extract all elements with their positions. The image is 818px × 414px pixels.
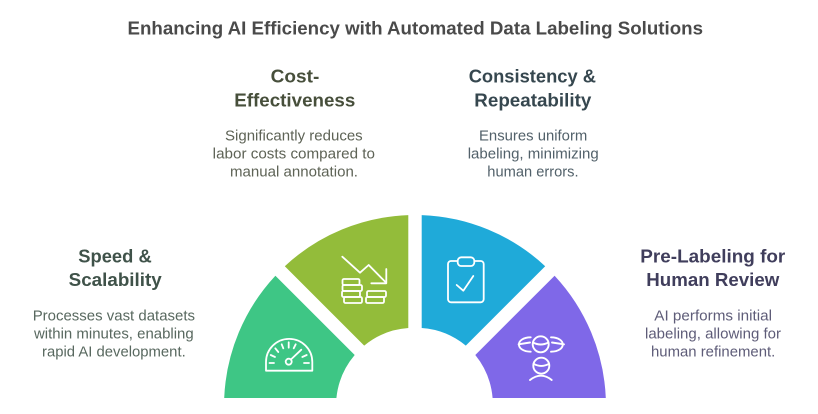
heading: speed and scalability: Scalability [69, 269, 162, 290]
description: pre-labeling for human review: labeling, allowing for [645, 325, 781, 342]
segment: green speed [224, 276, 355, 398]
description: pre-labeling for human review: human refinement. [651, 343, 775, 360]
icon: speedometer gauge [266, 339, 312, 371]
heading: pre-labeling for human review [640, 246, 785, 290]
icon: clipboard with check [448, 257, 484, 302]
segment: purple pre-labeling [475, 276, 606, 398]
heading: cost-effectiveness: Effectiveness [234, 90, 355, 111]
description: cost-effectiveness: labor costs compared to [213, 146, 375, 163]
heading: speed and scalability [69, 246, 162, 290]
description: consistency and repeatability: Ensures uniform [479, 128, 587, 145]
description: consistency and repeatability: labeling, minimizing [468, 146, 599, 163]
icon: falling cost arrow with coins [342, 257, 386, 303]
description: pre-labeling for human review: AI performs initial [654, 307, 772, 324]
panel: consistency and repeatability text [468, 66, 599, 181]
description: consistency and repeatability [468, 128, 599, 181]
description: cost-effectiveness: Significantly reduces [225, 128, 363, 145]
heading: pre-labeling for human review: Human Review [646, 269, 780, 290]
description: pre-labeling for human review [645, 307, 781, 360]
panel: cost-effectiveness text [213, 66, 375, 181]
description: cost-effectiveness: manual annotation. [230, 164, 358, 181]
heading: cost-effectiveness [234, 66, 355, 111]
description: speed and scalability [33, 307, 195, 360]
description: speed and scalability: Processes vast datasets [33, 307, 195, 324]
heading: consistency and repeatability: Repeatability [474, 90, 592, 111]
panel: pre-labeling text [640, 246, 785, 360]
heading: cost-effectiveness: Cost- [271, 66, 319, 86]
description: speed and scalability: rapid AI development. [42, 343, 186, 360]
title: Enhancing AI Efficiency with Automated Data Labeling Solutions [128, 18, 703, 38]
heading: speed and scalability: Speed & [78, 246, 152, 267]
segment: olive cost [285, 215, 408, 346]
heading: pre-labeling for human review: Pre-Labeling for [640, 246, 785, 267]
heading: consistency and repeatability [469, 66, 596, 111]
description: consistency and repeatability: human errors. [487, 164, 579, 181]
icon: AI and human review faces [519, 336, 564, 380]
panel: speed and scalability text [33, 246, 195, 360]
heading: consistency and repeatability: Consistency & [469, 66, 596, 86]
description: cost-effectiveness [213, 128, 375, 181]
description: speed and scalability: within minutes, enabling [33, 325, 194, 342]
segment: blue consistency [422, 215, 545, 346]
